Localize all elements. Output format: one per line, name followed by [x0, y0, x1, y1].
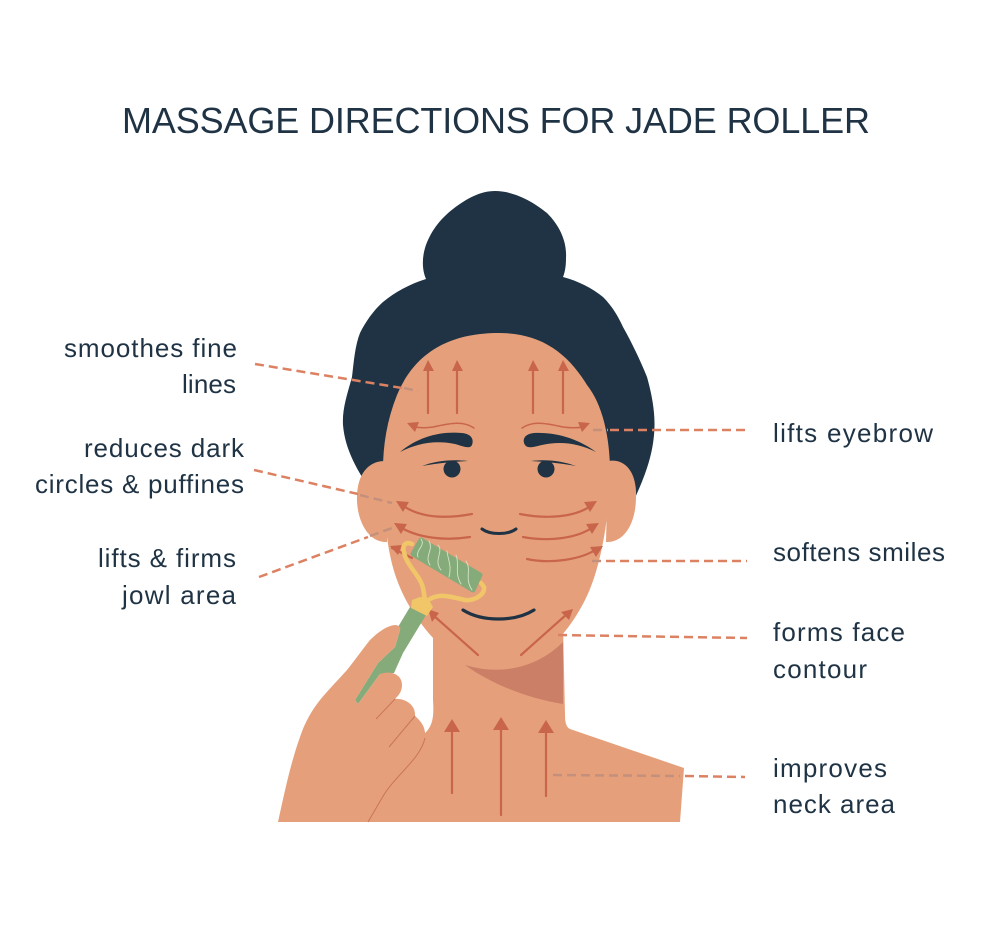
neck shadow — [465, 642, 563, 704]
hand — [278, 625, 425, 822]
label: smoothes fine lines: smoothes fine — [64, 333, 237, 363]
roller frame — [403, 543, 484, 600]
jawline arrows — [428, 609, 573, 655]
label: smoothes fine lines — [64, 333, 237, 399]
label: softens smiles: softens smiles — [773, 537, 945, 567]
leader line: forms face contour — [558, 635, 747, 638]
leader line: improves neck area — [553, 775, 745, 777]
label: lifts and firms jowl area: lifts & firms — [98, 543, 236, 573]
leader line: lifts eyebrow — [593, 429, 747, 431]
label: forms face contour: contour — [773, 654, 867, 684]
roller hub — [411, 597, 433, 616]
label: reduces dark circles and puffines: circles & puffines — [35, 469, 244, 499]
label: smoothes fine lines: lines — [182, 369, 236, 399]
leader line: softens smiles — [592, 560, 747, 562]
eyes — [422, 460, 576, 478]
leader line: lifts and firms jowl — [259, 528, 392, 577]
label: improves neck area: neck area — [773, 789, 896, 819]
label: lifts and firms jowl area: jowl area — [121, 580, 237, 610]
eyebrows — [400, 433, 596, 452]
label: lifts and firms jowl area — [98, 543, 237, 610]
label: lifts eyebrow: lifts eyebrow — [773, 418, 933, 448]
title: MASSAGE DIRECTIONS FOR JADE ROLLER — [122, 100, 870, 141]
label: improves neck area: improves — [773, 753, 887, 783]
hair — [343, 191, 655, 498]
label: forms face contour: forms face — [773, 617, 905, 647]
leader line: smoothes fine lines — [255, 364, 418, 391]
forehead arrows — [423, 360, 569, 413]
under-eye and cheek arrows — [390, 501, 603, 561]
mouth and nose lines — [463, 529, 534, 619]
jade roller — [355, 539, 484, 704]
face — [383, 333, 610, 673]
leader line: reduces dark circles — [254, 470, 392, 503]
jade stone — [413, 540, 480, 590]
neck arrows — [444, 717, 554, 815]
finger creases — [368, 699, 425, 822]
ears — [357, 461, 636, 542]
roller handle — [355, 607, 426, 704]
label: forms face contour — [773, 617, 905, 684]
eyebrow arrows — [407, 422, 590, 432]
label: reduces dark circles and puffines: reduces dark — [84, 433, 245, 463]
neck and shoulders — [366, 625, 684, 822]
label: improves neck area — [773, 753, 896, 819]
illustration: woman with jade roller — [278, 191, 684, 822]
label: reduces dark circles and puffines — [35, 433, 245, 499]
stone veins — [417, 539, 472, 590]
